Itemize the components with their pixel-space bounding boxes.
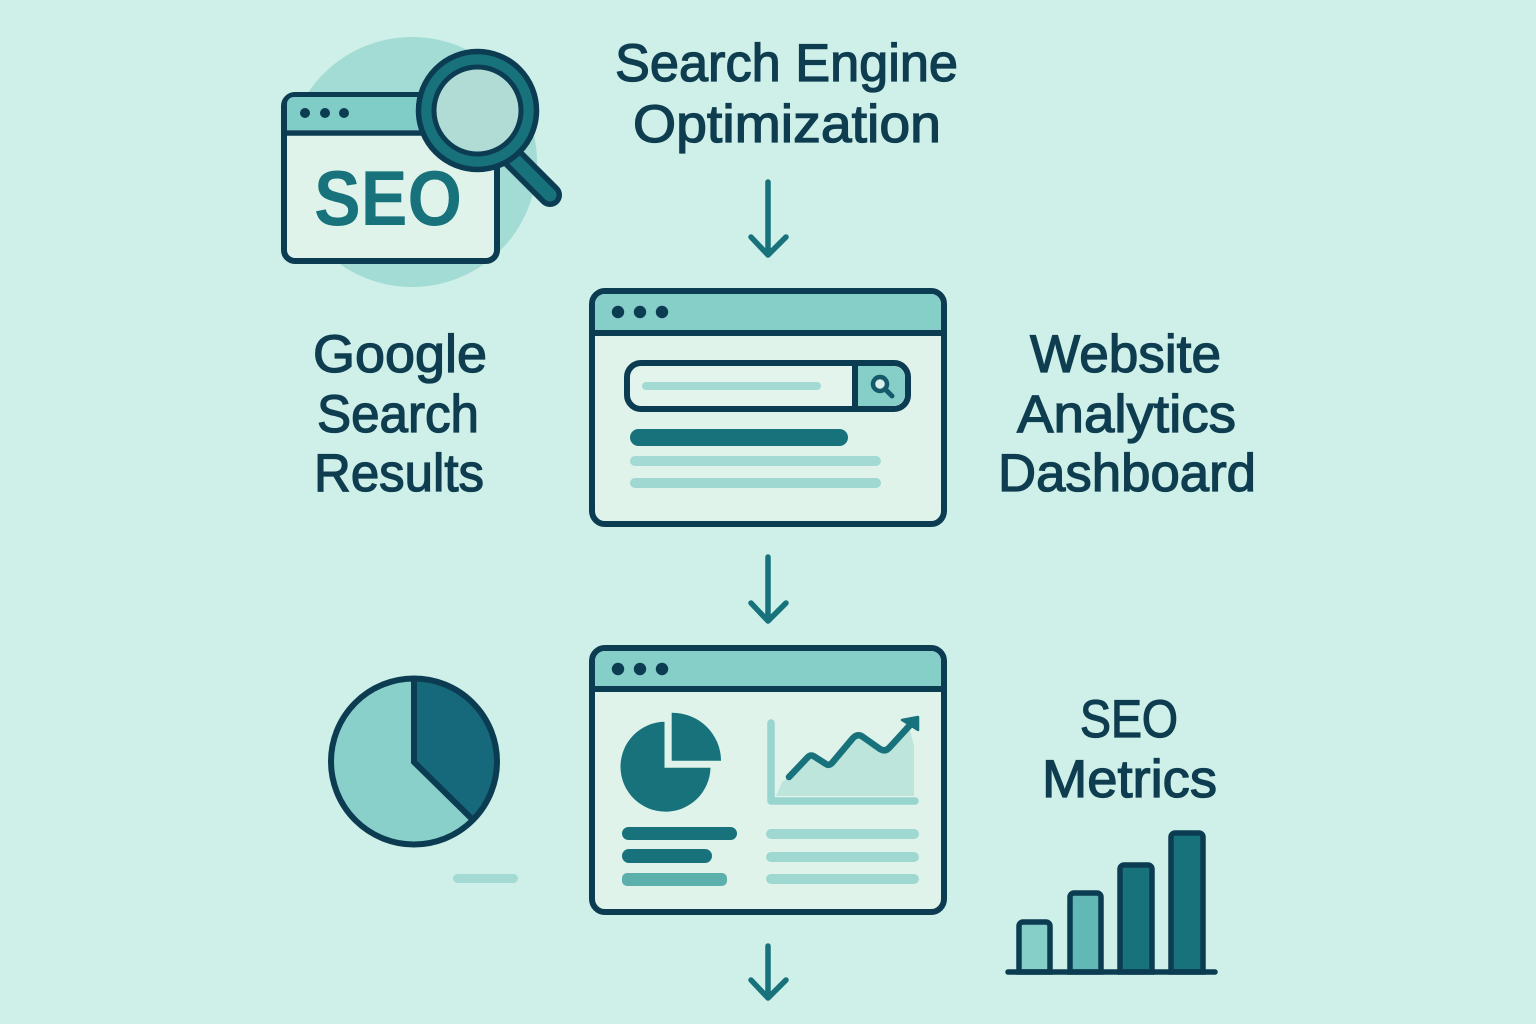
SEO label: SEO bbox=[314, 154, 462, 242]
icon: small magnifier bbox=[873, 377, 892, 396]
search bar bbox=[627, 363, 908, 409]
title bbox=[615, 34, 958, 154]
dashboard right bars bbox=[766, 829, 919, 884]
panel: analytics browser window bbox=[592, 648, 944, 912]
pie chart bbox=[331, 678, 497, 844]
label: Website Analytics Dashboard bbox=[998, 325, 1256, 503]
magnifying glass bbox=[418, 52, 550, 195]
label: Website Analytics Dashboard: Dashboard bbox=[998, 444, 1256, 503]
dashboard left bars bbox=[622, 827, 737, 886]
label: SEO Metrics: Metrics bbox=[1042, 750, 1217, 809]
legend bar bbox=[453, 874, 518, 883]
backdrop circle bbox=[287, 37, 537, 287]
title: Optimization bbox=[633, 95, 941, 154]
result lines bbox=[630, 429, 881, 488]
dashboard pie bbox=[621, 713, 721, 812]
label: SEO Metrics bbox=[1042, 690, 1217, 809]
panel: search results browser window bbox=[592, 291, 944, 524]
label: Google Search Results: Search bbox=[317, 385, 479, 444]
label: Google Search Results bbox=[313, 325, 487, 503]
label: Website Analytics Dashboard: Analytics bbox=[1017, 385, 1236, 444]
arrow: search window to analytics window bbox=[751, 557, 786, 621]
title: Search Engine bbox=[615, 34, 958, 93]
label: Google Search Results: Results bbox=[314, 444, 484, 503]
SEO browser window bbox=[284, 95, 497, 261]
label: Website Analytics Dashboard: Website bbox=[1030, 325, 1221, 384]
arrow: title to search window bbox=[751, 182, 786, 255]
icon: SEO browser with magnifier bbox=[284, 37, 550, 287]
dashboard line chart bbox=[771, 717, 918, 801]
bar chart bbox=[1008, 833, 1215, 972]
label: SEO Metrics: SEO bbox=[1080, 690, 1178, 749]
label: Google Search Results: Google bbox=[313, 325, 487, 384]
arrow: analytics window downward bbox=[751, 946, 786, 998]
